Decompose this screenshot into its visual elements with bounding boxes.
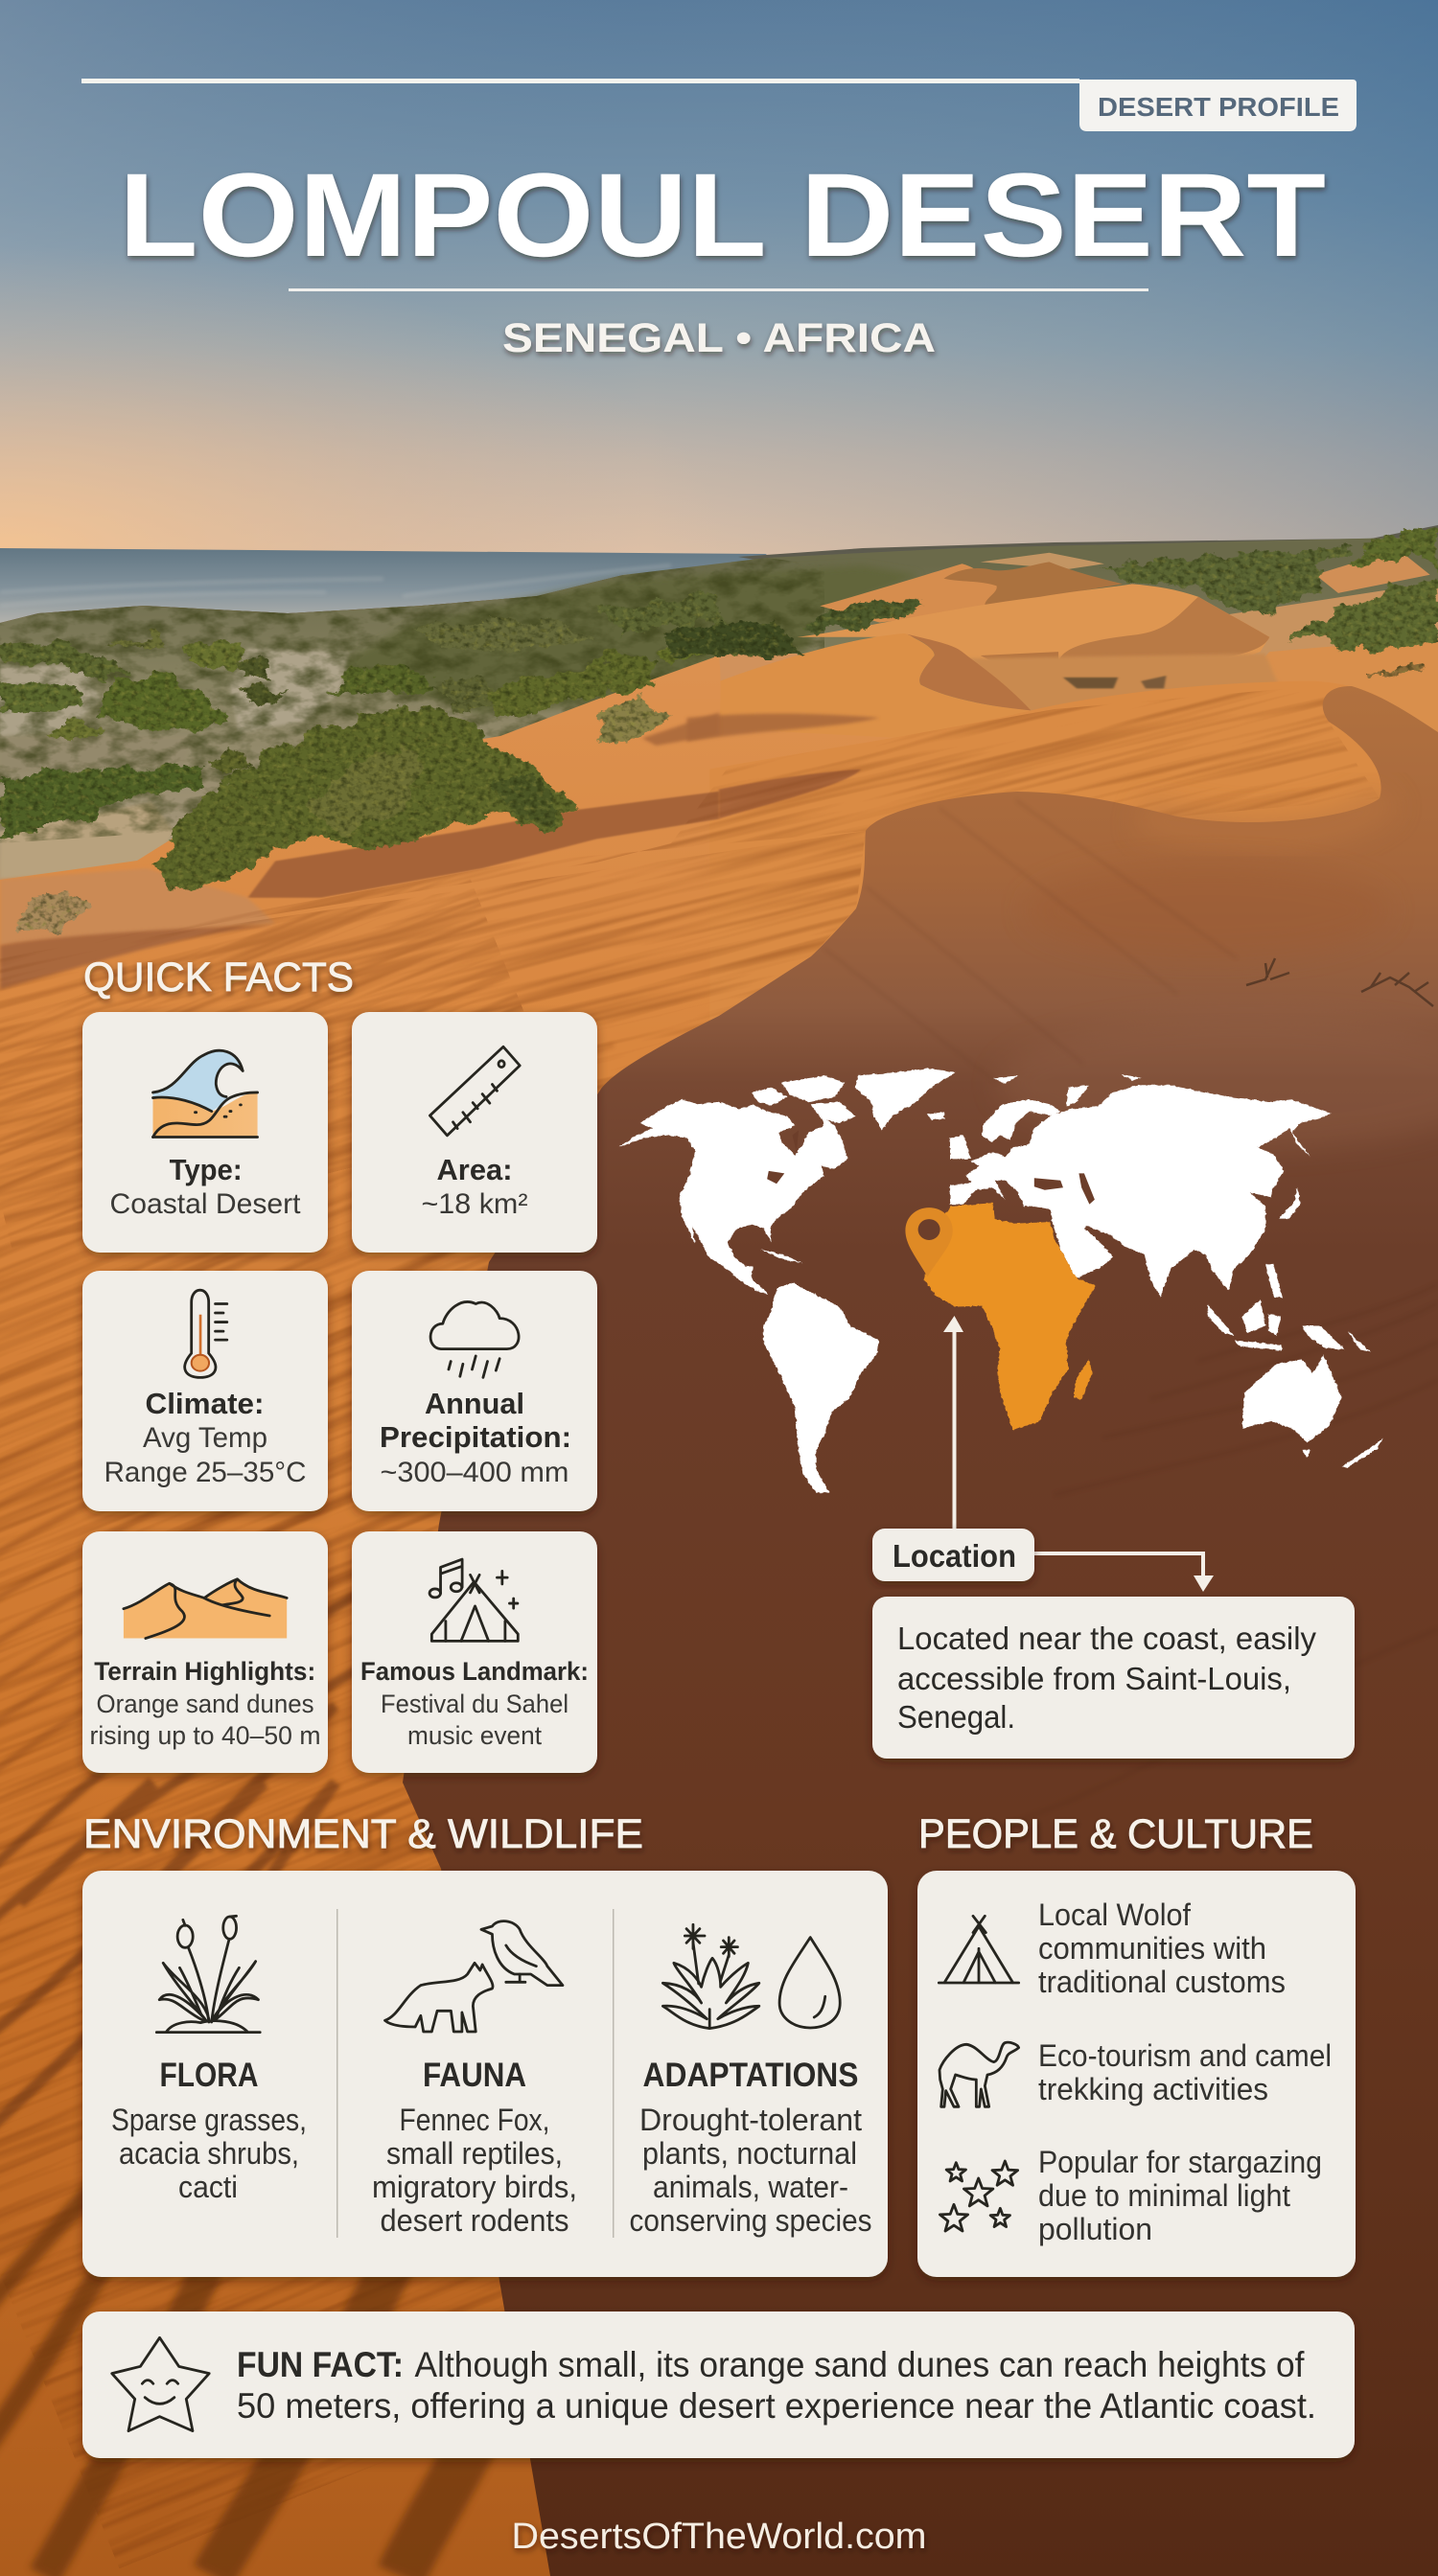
distant hills: [738, 525, 1438, 579]
arrow: location to description: [1034, 1552, 1214, 1592]
icon: stars: [939, 2161, 1018, 2231]
icon: camel: [939, 2042, 1019, 2106]
panel: quick facts cards: [82, 1012, 597, 1773]
text: adaptations: ADAPTATIONS: [642, 2057, 859, 2094]
text: local communities: communities with: [1038, 1931, 1266, 1966]
pale sand patches: [0, 649, 349, 880]
dune B: [797, 584, 1269, 681]
section heading: environment and wildlife: ENVIRONMENT & WILDLIFE: [83, 1811, 643, 1857]
fine sand ripple texture: [0, 588, 1408, 2568]
text: adaptations: conserving species: [629, 2203, 872, 2238]
card: type: [82, 1012, 328, 1253]
text: fun fact: [237, 2345, 1316, 2426]
text: fauna: migratory birds,: [372, 2170, 577, 2204]
text: famous landmark: Famous Landmark:: [360, 1657, 589, 1686]
text: flora: cacti: [178, 2170, 238, 2204]
text: fauna: Fennec Fox,: [399, 2103, 550, 2137]
text: famous landmark: Festival du Sahel: [381, 1690, 568, 1718]
text: adaptations: animals, water-: [653, 2170, 848, 2204]
text: terrain highlights: rising up to 40–50 m: [90, 1721, 320, 1750]
Africa highlighted: [924, 1203, 1096, 1430]
front dune: [687, 681, 1438, 1041]
tag: desert profile: DESERT PROFILE: [1098, 92, 1339, 122]
arrow: up to Senegal: [943, 1316, 963, 1530]
panel: people and culture: [917, 1871, 1356, 2277]
footer: website: DesertsOfTheWorld.com: [512, 2517, 926, 2557]
icon: flora: [156, 1916, 260, 2033]
section heading: quick facts: QUICK FACTS: [83, 954, 354, 1000]
text: climate: [104, 1387, 307, 1488]
big shrub: [18, 627, 719, 931]
icon: adaptations: [662, 1924, 840, 2029]
text: fauna: small reptiles,: [386, 2136, 563, 2171]
olive scrub haze: [336, 565, 920, 714]
icon: tent: [939, 1916, 1019, 1983]
text: annual precipitation: Annual: [425, 1387, 524, 1420]
dune C: [709, 633, 1031, 792]
text: flora: [111, 2057, 307, 2204]
text: eco-tourism: [1038, 2038, 1332, 2106]
text: climate: Climate:: [146, 1387, 265, 1420]
text: terrain highlights: Terrain Highlights:: [94, 1657, 315, 1686]
header: [81, 79, 1357, 361]
dune A: [820, 562, 1123, 623]
text: famous landmark: [360, 1657, 589, 1750]
callout: location description: Senegal.: [897, 1699, 1015, 1735]
shadowed dune slope: [403, 686, 1438, 2576]
text: fun fact: FUN FACT:: [237, 2345, 404, 2384]
text: type: [109, 1153, 301, 1220]
mottled scrub texture: [0, 558, 824, 843]
inland water cutouts: [767, 1131, 1095, 1205]
text: annual precipitation: Precipitation:: [380, 1420, 571, 1454]
sand ripples: [0, 1045, 614, 2576]
text: climate: Avg Temp: [143, 1422, 267, 1454]
tag: desert profile: [1079, 80, 1357, 131]
subtitle: SENEGAL • AFRICA: [502, 315, 936, 361]
icon: fauna: [385, 1921, 563, 2032]
card: annual precipitation: [352, 1271, 597, 1511]
text: fauna: [372, 2057, 577, 2238]
text: flora: Sparse grasses,: [111, 2103, 307, 2137]
card: climate: [82, 1271, 328, 1511]
text: stargazing: pollution: [1038, 2212, 1152, 2246]
icon: rain cloud: [430, 1301, 519, 1377]
card: famous landmark: [352, 1531, 597, 1773]
text: famous landmark: music event: [407, 1721, 542, 1750]
text: eco-tourism: trekking activities: [1038, 2072, 1268, 2106]
card: area: [352, 1012, 597, 1253]
title divider: [289, 288, 1148, 291]
card: terrain highlights: [82, 1531, 328, 1773]
text: local communities: [1038, 1898, 1286, 1999]
text: type: Coastal Desert: [109, 1188, 301, 1220]
text: climate: Range 25–35°C: [104, 1457, 307, 1488]
icon: dunes: [124, 1579, 287, 1639]
panel: environment and wildlife: [82, 1871, 888, 2277]
top rule: [81, 79, 1079, 83]
title: LOMPOUL DESERT: [119, 150, 1326, 282]
location pin: [905, 1208, 953, 1276]
sea: [0, 548, 767, 623]
icon: ruler: [429, 1046, 520, 1136]
icon: festival tent and music notes: [429, 1559, 518, 1641]
text: area: ~18 km²: [422, 1188, 527, 1220]
icon: wave and sand: [153, 1050, 258, 1138]
text: annual precipitation: ~300–400 mm: [380, 1457, 569, 1488]
sky: [0, 0, 1438, 575]
world map: [618, 1069, 1384, 1493]
text: eco-tourism: Eco-tourism and camel: [1038, 2038, 1332, 2073]
right bank sand and vegetation: [709, 527, 1438, 792]
callout: location description: accessible from Saint-Louis,: [897, 1661, 1291, 1696]
text: local communities: Local Wolof: [1038, 1898, 1191, 1932]
text: annual precipitation: [380, 1387, 571, 1488]
foreground sand: [0, 656, 1438, 2576]
text: stargazing: [1038, 2145, 1322, 2246]
text: terrain highlights: Orange sand dunes: [96, 1690, 314, 1718]
text: fun fact: 50 meters, offering a unique desert experience near the Atlantic coast.: [237, 2386, 1316, 2426]
callout: location description: [872, 1597, 1355, 1759]
icon: thermometer: [185, 1290, 227, 1377]
label: location: [872, 1529, 1034, 1581]
text: flora: FLORA: [159, 2057, 259, 2094]
text: stargazing: Popular for stargazing: [1038, 2145, 1322, 2179]
text: adaptations: Drought-tolerant: [639, 2103, 862, 2137]
label: location: Location: [893, 1538, 1016, 1574]
white continents: [618, 1069, 1384, 1493]
text: terrain highlights: [90, 1657, 320, 1750]
text: flora: acacia shrubs,: [119, 2136, 299, 2171]
section heading: people and culture: PEOPLE & CULTURE: [918, 1811, 1313, 1857]
sand shadows and large shrubs: [0, 627, 719, 989]
coastal scrub land: [0, 537, 1438, 958]
text: fauna: FAUNA: [423, 2057, 526, 2094]
text: adaptations: plants, nocturnal: [642, 2136, 857, 2171]
callout: location description: Located near the coast, easily: [897, 1621, 1316, 1656]
text: fauna: desert rodents: [380, 2203, 569, 2238]
text: local communities: traditional customs: [1038, 1965, 1286, 1999]
icon: smiling star: [112, 2337, 209, 2431]
text: area: [422, 1153, 527, 1220]
panel: fun fact: [82, 2312, 1355, 2458]
vegetation on left: [0, 593, 719, 840]
text: stargazing: due to minimal light: [1038, 2178, 1290, 2213]
text: adaptations: [629, 2057, 872, 2238]
text: type: Type:: [170, 1153, 243, 1186]
shrubs along far dune line: [664, 599, 921, 656]
text: fun fact: Although small, its orange sand dunes can reach heights of: [414, 2345, 1305, 2384]
text: area: Area:: [437, 1153, 512, 1186]
